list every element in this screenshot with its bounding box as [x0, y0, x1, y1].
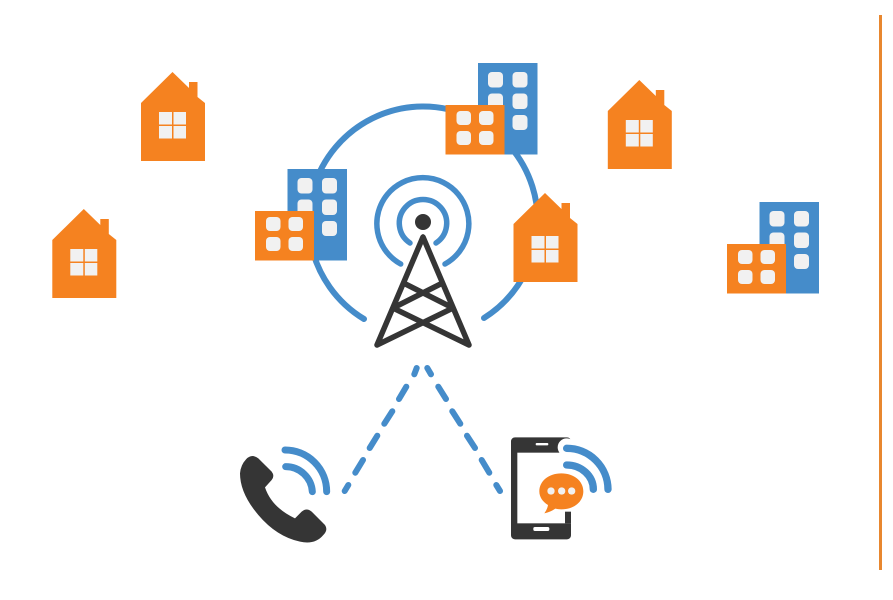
icon: signal tower: [377, 178, 469, 345]
smartphone signal waves: [567, 448, 608, 489]
icon: house top left: [141, 72, 205, 161]
dashed link to smartphone: [427, 368, 500, 491]
dashed link to telephone: [345, 368, 417, 491]
tower beacon: [415, 214, 431, 230]
telephone handset: [240, 456, 326, 542]
icon: house left: [52, 209, 116, 298]
icon: buildings top centre: [446, 63, 538, 154]
tower frame: [377, 237, 469, 345]
icon: smartphone: [511, 437, 608, 539]
message bubble: [539, 473, 583, 513]
coverage arc: [309, 106, 538, 319]
icon: buildings left of tower: [255, 169, 347, 260]
icon: telephone: [240, 450, 327, 542]
icon: house on coverage arc: [514, 193, 578, 282]
icon: buildings far right: [727, 202, 819, 294]
right border rule: [879, 15, 882, 570]
telephone signal waves: [285, 450, 327, 492]
tower signal waves: [377, 178, 469, 264]
smartphone body: [511, 437, 571, 539]
icon: house top right: [608, 80, 672, 169]
